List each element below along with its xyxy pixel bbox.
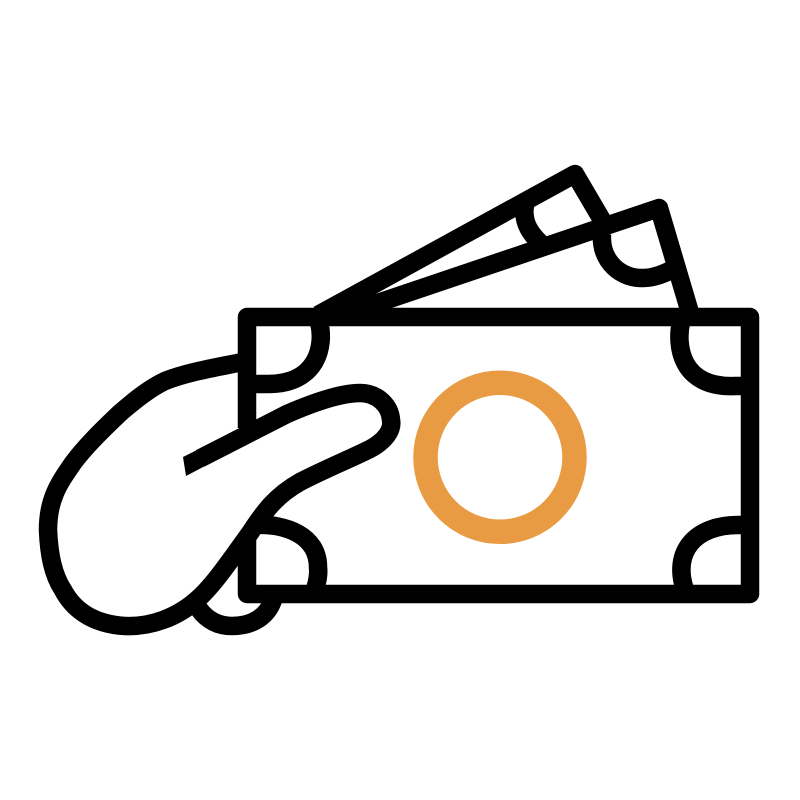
orange circle: [426, 383, 574, 532]
back banknote: [318, 174, 602, 315]
middle banknote: [345, 208, 691, 316]
hand: [48, 361, 391, 626]
front banknote: [247, 317, 750, 594]
